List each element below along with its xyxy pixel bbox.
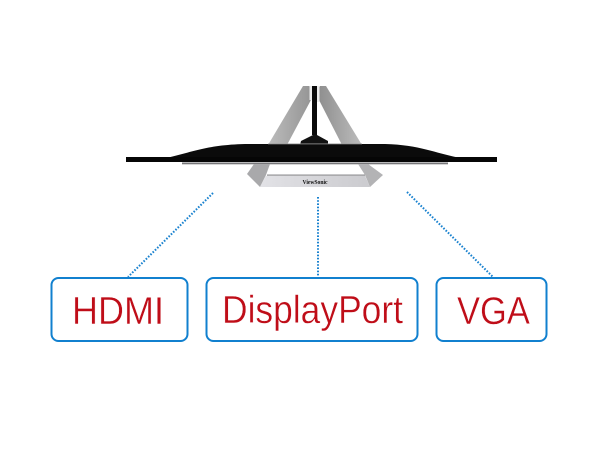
dotted line: HDMI (128, 193, 213, 277)
label: HDMI (52, 278, 188, 341)
monitor top highlight (268, 142, 362, 145)
stand foot (300, 135, 328, 145)
monitor lower strip (182, 162, 448, 164)
stand base face (260, 176, 370, 187)
label: HDMI: HDMI (72, 290, 164, 333)
dotted line: DisplayPort (317, 197, 319, 276)
lower stand left side (247, 164, 270, 187)
stand upper left arm (268, 86, 312, 145)
monitor with stand (126, 86, 497, 187)
ViewSonic logo: ViewSonic (302, 180, 328, 186)
neck highlights (310, 86, 320, 102)
monitor panel edge (126, 157, 497, 162)
stand base inner edge (267, 174, 365, 176)
stand upper right arm (319, 86, 362, 145)
label: VGA: VGA (457, 290, 530, 333)
dotted line: VGA (407, 192, 493, 277)
lower stand right side (358, 164, 383, 187)
label: VGA (436, 278, 546, 341)
label: DisplayPort (206, 278, 418, 341)
label: DisplayPort: DisplayPort (222, 289, 403, 332)
monitor rear body (168, 144, 458, 158)
stand neck (312, 86, 317, 135)
